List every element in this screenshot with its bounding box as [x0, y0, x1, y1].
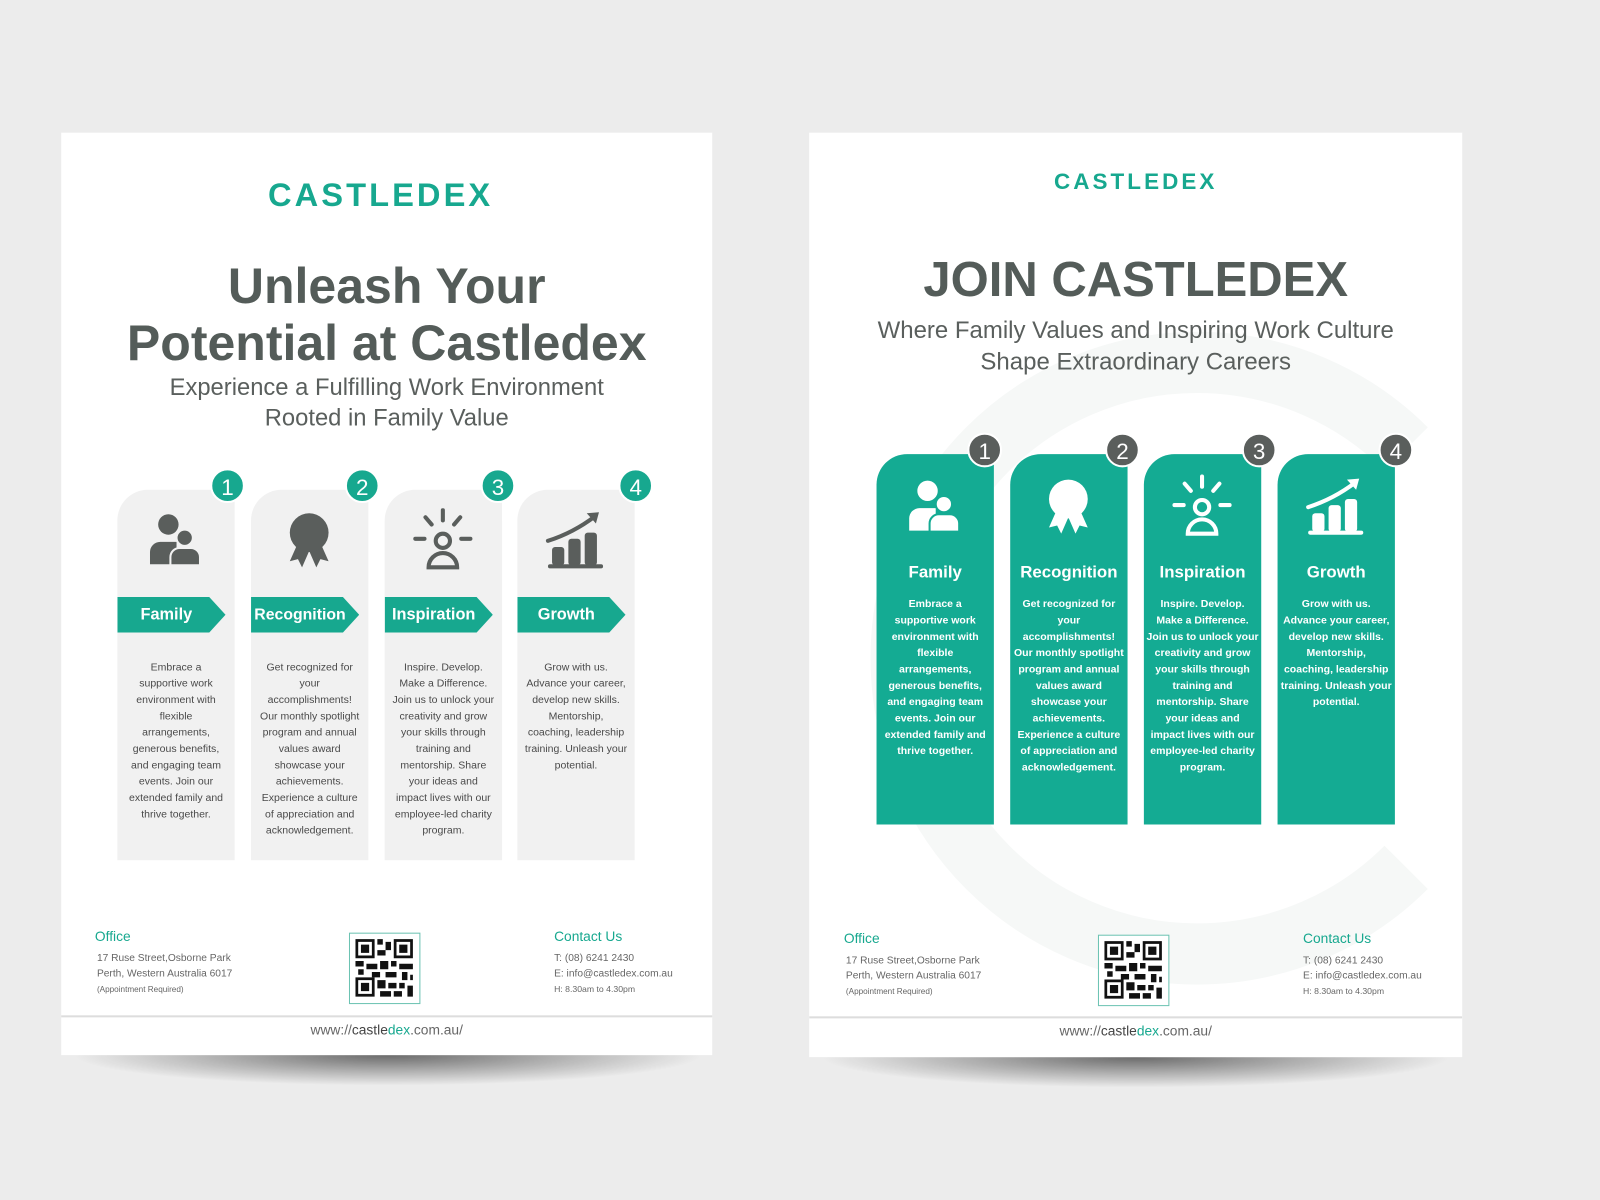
text: Inspiration: impact lives with our: [1151, 730, 1255, 741]
text: Recognition: Experience a culture: [262, 793, 358, 804]
text: Family: flexible: [917, 648, 953, 659]
ribbon: Family: [117, 597, 226, 633]
text: Recognition: accomplishments!: [268, 695, 352, 706]
text: Growth: training. Unleash your: [1281, 681, 1392, 692]
text: Recognition: acknowledgement.: [1022, 762, 1116, 773]
ribbon: Family: Family: [140, 606, 192, 623]
text: Recognition: showcase your: [1031, 697, 1107, 708]
text: Family: and engaging team: [131, 760, 221, 771]
icon: people: [909, 480, 958, 531]
website: www://castledex.com.au/: [311, 1022, 463, 1038]
text: Inspiration: Make a Difference.: [1156, 615, 1249, 627]
ribbon: Recognition: [251, 597, 359, 633]
card: Growth: [1278, 454, 1395, 824]
subtitle: Rooted in Family Value: [265, 404, 509, 431]
text: Recognition: your: [299, 679, 320, 690]
text: Recognition: of appreciation and: [265, 809, 354, 820]
footer: contact: Contact Us: [1303, 931, 1371, 946]
text: Inspiration: your ideas and: [1165, 713, 1240, 724]
footer: office: 17 Ruse Street,Osborne Park: [97, 953, 231, 964]
icon: growth chart: [546, 512, 604, 568]
heading: Growth: Growth: [1307, 563, 1366, 582]
badge 2: [1105, 433, 1140, 467]
footer: contact: Contact Us: [554, 929, 622, 944]
text: Growth: potential.: [1313, 697, 1360, 708]
text: Growth: Advance your career,: [1283, 615, 1389, 627]
text: Family: supportive work: [139, 679, 213, 690]
title: [127, 259, 647, 372]
text: Family: and engaging team: [887, 697, 983, 708]
text: Inspiration: employee-led charity: [1150, 746, 1255, 757]
text: Growth: Grow with us.: [544, 662, 608, 673]
badge 1: [210, 468, 245, 503]
icon: inspiration: [413, 508, 472, 570]
subtitle: [878, 316, 1394, 374]
text: Family: generous benefits,: [888, 681, 982, 692]
text: Family: environment with: [136, 695, 216, 706]
text: Growth: [525, 662, 627, 771]
text: Inspiration: [1146, 599, 1259, 773]
text: Inspiration: Make a Difference.: [399, 679, 487, 690]
text: Inspiration: training and: [1172, 681, 1233, 692]
text: Inspiration: Join us to unlock your: [393, 695, 494, 706]
ribbon: Inspiration: [385, 597, 493, 633]
text: Growth: Mentorship,: [549, 711, 603, 722]
badge 4: 4: [629, 474, 642, 500]
logo: CASTLEDEX: [268, 177, 493, 213]
text: Inspiration: creativity and grow: [1155, 648, 1250, 659]
badge 4: 4: [1390, 439, 1402, 464]
subtitle: [170, 373, 604, 431]
panel: right poster: [809, 133, 1462, 1057]
heading: Inspiration: Inspiration: [1160, 563, 1246, 582]
badge 2: [345, 468, 380, 503]
footer: office: Office: [844, 931, 880, 946]
subtitle: Shape Extraordinary Careers: [980, 347, 1291, 374]
text: Recognition: Get recognized for: [266, 662, 353, 673]
footer: contact: T: (08) 6241 2430: [554, 953, 634, 964]
text: Growth: Advance your career,: [526, 679, 626, 690]
text: Recognition: Experience a culture: [1017, 730, 1120, 741]
ribbon: Recognition: Recognition: [254, 606, 346, 623]
footer: contact: H: 8.30am to 4.30pm: [554, 984, 635, 994]
icon: award: [290, 513, 329, 568]
text: Inspiration: program.: [1180, 762, 1225, 773]
text: Recognition: [260, 662, 360, 837]
footer: office: Perth, Western Australia 6017: [846, 970, 981, 982]
text: Family: arrangements,: [142, 728, 210, 739]
shadow: right poster: [819, 1057, 1452, 1088]
badge 1: [967, 433, 1002, 467]
text: Family: generous benefits,: [133, 744, 219, 755]
footer: contact: [1303, 931, 1422, 996]
text: Inspiration: employee-led charity: [395, 809, 492, 820]
badge 2: 2: [356, 474, 368, 500]
text: Recognition: program and annual: [1018, 664, 1119, 676]
text: Inspiration: your ideas and: [409, 777, 478, 788]
footer: office: Office: [95, 929, 131, 944]
footer: office: Perth, Western Australia 6017: [97, 968, 232, 980]
text: Recognition: achievements.: [276, 777, 344, 788]
text: Inspiration: Inspire. Develop.: [404, 662, 483, 673]
text: Family: events. Join our: [895, 713, 975, 724]
text: Inspiration: your skills through: [401, 728, 486, 739]
heading: Recognition: Recognition: [1020, 563, 1118, 582]
text: Recognition: achievements.: [1033, 713, 1105, 724]
footer: office: [95, 929, 232, 994]
text: Recognition: values award: [1036, 681, 1102, 692]
text: Recognition: Our monthly spotlight: [1014, 648, 1124, 659]
ribbon: Growth: [517, 597, 626, 633]
badge 3: 3: [1253, 439, 1265, 464]
icon: growth chart: [1306, 478, 1364, 535]
ribbon: Inspiration: Inspiration: [392, 606, 475, 623]
text: Inspiration: mentorship. Share: [1156, 697, 1249, 708]
text: Inspiration: mentorship. Share: [400, 760, 486, 771]
subtitle: Where Family Values and Inspiring Work Culture: [878, 316, 1394, 343]
text: Recognition: Our monthly spotlight: [260, 711, 359, 722]
badge 3: [1242, 433, 1277, 467]
text: Inspiration: [392, 662, 494, 837]
badge 3: 3: [492, 474, 504, 500]
text: Recognition: [1014, 599, 1124, 773]
background C watermark: [870, 332, 1428, 984]
text: Growth: develop new skills.: [1289, 632, 1384, 643]
icon: inspiration: [1172, 474, 1232, 536]
text: Growth: coaching, leadership: [528, 728, 624, 739]
text: Inspiration: your skills through: [1155, 664, 1250, 676]
website: www://castledex.com.au/: [1060, 1023, 1212, 1039]
text: Growth: [1280, 599, 1392, 708]
footer: contact: [554, 929, 673, 994]
footer: office: [844, 931, 981, 996]
footer: contact: H: 8.30am to 4.30pm: [1303, 986, 1384, 996]
footer: contact: E: info@castledex.com.au: [1303, 970, 1422, 982]
text: Family: Embrace a: [909, 599, 962, 610]
text: Family: extended family and: [129, 793, 223, 804]
footer: office: (Appointment Required): [97, 985, 184, 994]
card: Family: [117, 490, 235, 860]
text: Family: events. Join our: [139, 777, 213, 788]
badge 3: [481, 468, 515, 503]
card: Inspiration: [1144, 454, 1261, 824]
text: Family: Embrace a: [151, 662, 201, 673]
card: Inspiration: [385, 490, 502, 860]
qr code: [349, 933, 420, 1004]
card: Growth: [517, 490, 635, 860]
footer: office: (Appointment Required): [846, 987, 933, 996]
title: Potential at Castledex: [127, 317, 647, 372]
text: Growth: training. Unleash your: [525, 744, 627, 755]
text: Growth: potential.: [555, 760, 597, 771]
panel: left poster: [61, 133, 712, 1055]
qr code: [1098, 935, 1169, 1006]
badge 1: 1: [221, 474, 234, 500]
text: Recognition: showcase your: [275, 760, 345, 771]
text: Family: flexible: [160, 711, 192, 722]
badge 2: 2: [1116, 439, 1129, 464]
card: Family: [877, 454, 994, 824]
text: Recognition: acknowledgement.: [266, 826, 353, 837]
text: Family: arrangements,: [899, 664, 971, 676]
card: Recognition: [251, 490, 368, 860]
text: Family: [885, 599, 986, 757]
text: Family: [129, 662, 223, 820]
badge 1: 1: [978, 439, 991, 464]
text: Growth: Mentorship,: [1306, 648, 1366, 659]
text: Family: supportive work: [895, 615, 976, 627]
heading: Family: Family: [909, 563, 962, 582]
logo: CASTLEDEX: [1054, 168, 1217, 194]
footer: contact: T: (08) 6241 2430: [1303, 955, 1383, 966]
text: Family: environment with: [892, 632, 979, 643]
icon: award: [1049, 480, 1088, 534]
text: Inspiration: impact lives with our: [396, 793, 491, 804]
title: JOIN CASTLEDEX: [923, 253, 1348, 307]
text: Inspiration: Inspire. Develop.: [1161, 599, 1245, 610]
text: Inspiration: creativity and grow: [400, 711, 487, 722]
text: Recognition: program and annual: [263, 728, 357, 739]
text: Growth: Grow with us.: [1302, 599, 1371, 610]
text: Inspiration: training and: [416, 744, 471, 755]
text: Inspiration: program.: [422, 826, 464, 837]
text: Growth: develop new skills.: [532, 695, 620, 706]
text: Recognition: accomplishments!: [1023, 632, 1115, 643]
footer: office: 17 Ruse Street,Osborne Park: [846, 955, 980, 966]
badge 4: [1379, 433, 1413, 467]
text: Family: extended family and: [885, 730, 986, 741]
card: Recognition: [1010, 454, 1128, 824]
shadow: left poster: [71, 1055, 704, 1086]
text: Recognition: your: [1057, 615, 1080, 627]
text: Recognition: of appreciation and: [1020, 746, 1117, 757]
footer: contact: E: info@castledex.com.au: [554, 968, 673, 980]
text: Recognition: values award: [279, 744, 341, 755]
badge 4: [618, 468, 653, 503]
text: Family: thrive together.: [141, 809, 211, 820]
subtitle: Experience a Fulfilling Work Environment: [170, 373, 604, 400]
ribbon: Growth: Growth: [538, 606, 595, 623]
text: Family: thrive together.: [897, 746, 973, 757]
text: Inspiration: Join us to unlock your: [1147, 632, 1259, 643]
icon: people: [150, 514, 199, 564]
text: Growth: coaching, leadership: [1284, 664, 1388, 676]
text: Recognition: Get recognized for: [1022, 599, 1115, 610]
title: Unleash Your: [228, 259, 546, 314]
